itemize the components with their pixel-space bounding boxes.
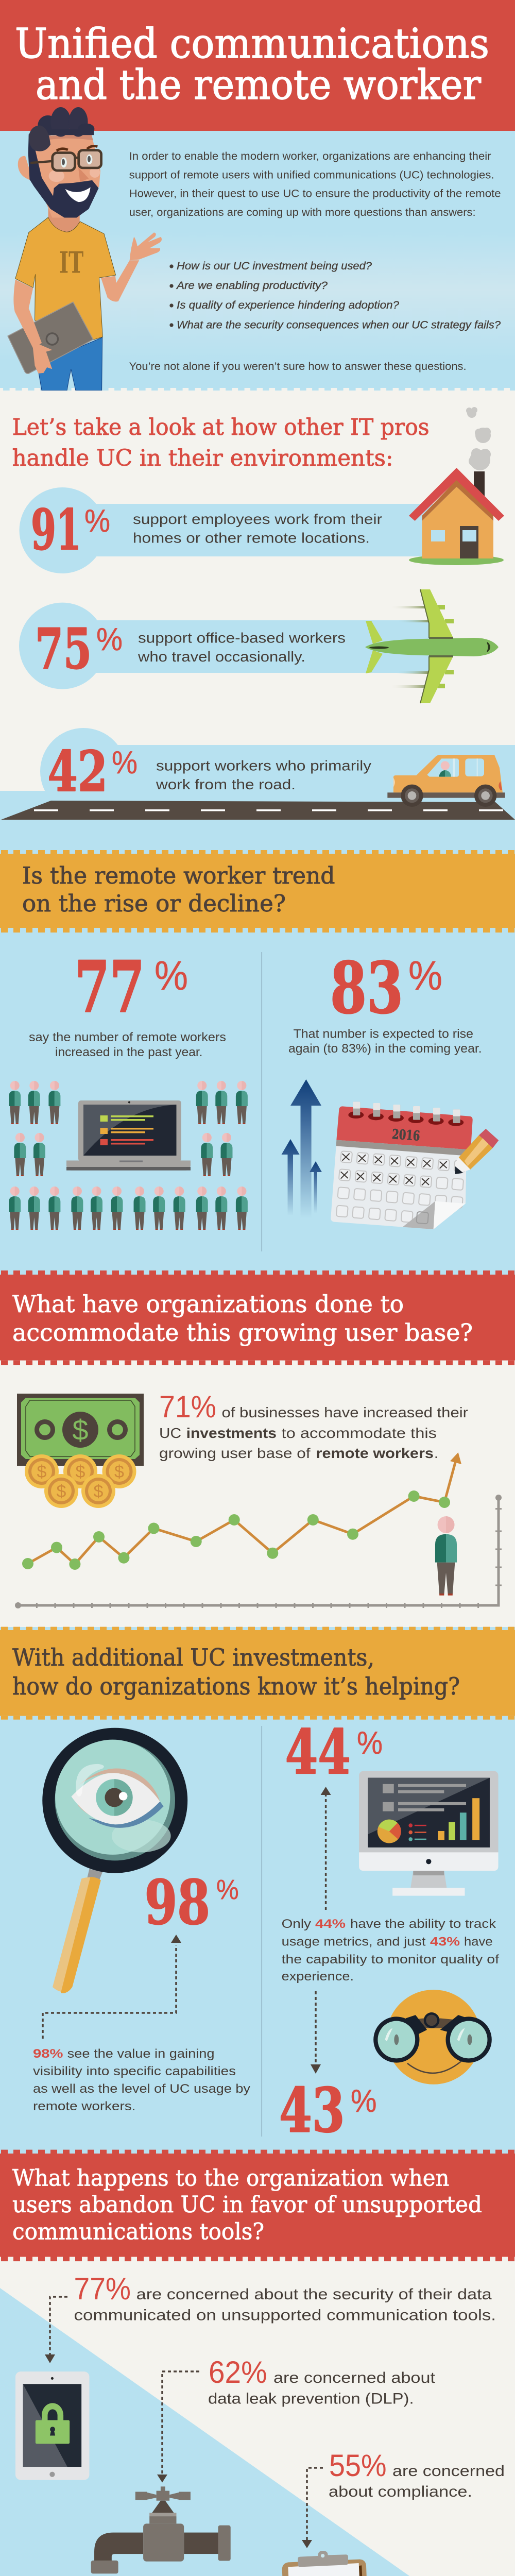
panel: how organizations know heading: [0, 1627, 515, 2150]
stat: 55% concern: [329, 2448, 505, 2500]
stat: 62% concern: data leak prevention (DLP).: [208, 2391, 414, 2408]
text: 44% and 43% description: the capability to monitor quality of: [282, 1953, 499, 1967]
icon: rising arrows: [281, 1079, 322, 1218]
stat text: 42%: work from the road.: [156, 776, 296, 792]
icon: house: [409, 407, 504, 565]
stat text: 42%: 42: [47, 739, 108, 804]
stat: 62% concern: [208, 2355, 436, 2408]
stat: 91%: support employees work from their: [133, 511, 382, 527]
stat text: 42%: support workers who primarily: [156, 757, 371, 774]
icon: money and coins: $: [94, 1482, 104, 1501]
intro text: [129, 150, 501, 218]
text: 44% and 43% description: have: [464, 1935, 493, 1948]
text: 44% and 43% description: usage metrics, and just: [282, 1935, 426, 1948]
stat: 98%: %: [216, 1874, 239, 1905]
line chart: [15, 1452, 502, 1608]
icon: calendar: [331, 1101, 499, 1229]
arrow: 43% connector: [311, 1991, 321, 2074]
heading: [12, 414, 430, 471]
question list: How is our UC investment being used?: [177, 260, 372, 272]
stat: 43%: %: [351, 2083, 377, 2119]
icon: money and coins: $: [37, 1462, 47, 1482]
intro text: However, in their quest to use UC to ensure the productivity of the remote: [129, 188, 501, 200]
stat: 75%: [19, 603, 430, 689]
stat: 98%: 98: [145, 1867, 210, 1938]
calendar year: 2016: [391, 1127, 420, 1144]
icon: person: [435, 1516, 457, 1596]
stat: 62% concern: are concerned about: [273, 2369, 436, 2386]
heading: accommodate this growing user base?: [12, 1319, 473, 1347]
text: 98% description: [33, 2047, 250, 2113]
stat: 91%: homes or other remote locations.: [133, 530, 370, 546]
icon: money and coins: $: [76, 1462, 85, 1482]
text: 98% description: 98%: [33, 2047, 63, 2061]
heading: [12, 2165, 482, 2245]
intro text: support of remote users with unified communications (UC) technologies.: [129, 169, 494, 181]
heading: users abandon UC in favor of unsupported: [12, 2192, 482, 2218]
stat: 91%: 91: [31, 498, 81, 563]
icon: tablet with lock: [15, 2371, 89, 2480]
heading: What have organizations done to: [12, 1290, 404, 1318]
heading: how do organizations know it’s helping?: [12, 1672, 460, 1700]
icon: magnifying glass with eye: [42, 1728, 187, 1993]
stat: 71% text: growing user base of: [159, 1445, 311, 1461]
title: [15, 20, 489, 109]
heading: With additional UC investments,: [12, 1643, 374, 1671]
stat text: 42%: [47, 739, 371, 804]
text: 98% description: as well as the level of UC usage by: [33, 2082, 250, 2096]
panel: what organizations have done heading: [0, 1270, 515, 1627]
panel: remote worker trend background: [0, 791, 515, 1270]
stat: 77%: %: [154, 953, 188, 998]
stat: 91%: [20, 487, 454, 573]
closing line: You’re not alone if you weren’t sure how to answer these questions.: [129, 361, 467, 372]
stat: 71% text: investments: [186, 1425, 277, 1441]
intro text: user, organizations are coming up with more questions than answers:: [129, 207, 476, 218]
stat: 77% concern: 77%: [74, 2272, 131, 2306]
illustration: IT worker character: [8, 107, 162, 391]
stat: 42%: [40, 728, 515, 815]
heading: Let’s take a look at how other IT pros: [12, 414, 430, 440]
question list: Are we enabling productivity?: [176, 280, 328, 292]
stat: 71% text: UC: [159, 1425, 181, 1441]
stat: 71% text: to accommodate this: [281, 1425, 437, 1441]
stat: 83%: [288, 947, 482, 1056]
stat: 77%: increased in the past year.: [55, 1045, 203, 1059]
icon: money and coins: $: [114, 1462, 124, 1482]
heading: [12, 1290, 473, 1347]
panel: header: [0, 0, 515, 131]
icon: monitor dashboard: [359, 1771, 499, 1896]
stat: 71% text: remote workers: [316, 1445, 434, 1461]
stat: 83%: 83: [330, 947, 403, 1029]
text: 44% and 43% description: experience.: [282, 1970, 354, 1984]
background: blue diagonal: [0, 2288, 496, 2576]
heading: communications tools?: [12, 2219, 264, 2245]
panel: trend heading band: [0, 850, 515, 933]
arrow: to faucet: [157, 2371, 199, 2483]
text: 98% description: see the value in gaining: [67, 2047, 214, 2061]
stat: 55% concern: 55%: [329, 2448, 387, 2483]
arrow: to tablet: [45, 2297, 67, 2363]
text: 44% and 43% description: Only: [282, 1917, 311, 1931]
stat: 75%: who travel occasionally.: [138, 649, 305, 665]
title: Unified communications: [15, 20, 489, 67]
icon: money and coins: [17, 1394, 144, 1508]
icon: money and coins: $: [72, 1414, 89, 1446]
arrow: 44% connector: [321, 1787, 331, 1910]
stat: 75%: %: [96, 622, 123, 657]
question list: [170, 260, 501, 331]
stat: 44%: %: [357, 1725, 383, 1761]
people icons: [9, 1081, 248, 1230]
icon: airplane: [365, 589, 499, 703]
stat: 77% concern: are concerned about the security of their data: [136, 2286, 492, 2303]
text: 98% description: remote workers.: [33, 2099, 135, 2113]
stat: 71% text: 71%: [159, 1389, 216, 1424]
arrow: 98% connector: [43, 1935, 181, 2039]
question list: What are the security consequences when our UC strategy fails?: [177, 319, 501, 331]
stat: 43%: 43: [279, 2074, 345, 2146]
heading: Is the remote worker trend: [22, 862, 335, 889]
stat: 77% concern: [74, 2272, 496, 2324]
stat text: 42%: %: [112, 745, 138, 781]
title: and the remote worker: [36, 61, 482, 109]
panel: how other IT pros handle UC: [0, 391, 515, 815]
heading: [22, 862, 335, 917]
icon: laptop: [66, 1100, 191, 1171]
text: 44% and 43% description: 44%: [315, 1917, 346, 1931]
arrow: to clipboard: [302, 2468, 323, 2548]
stat: 77%: [29, 946, 226, 1059]
panel: abandoning UC heading: [0, 2150, 515, 2576]
text: 44% and 43% description: have the ability to track: [350, 1917, 496, 1931]
stat: 62% concern: 62%: [209, 2355, 267, 2389]
stat: 71% text: [159, 1389, 468, 1461]
heading: [12, 1643, 460, 1700]
stat: 55% concern: about compliance.: [329, 2483, 472, 2500]
stat: 75%: 75: [35, 617, 92, 682]
stat: 75%: support office-based workers: [138, 630, 346, 646]
stat: 71% text: .: [434, 1445, 438, 1461]
icon: clipboard checklist: [282, 2551, 377, 2576]
icon: money and coins: $: [57, 1482, 66, 1501]
icon: dripping faucet: [86, 2486, 231, 2576]
stat: 71% text: of businesses have increased their: [221, 1404, 468, 1420]
stat: 55% concern: are concerned: [392, 2463, 505, 2480]
icon: car: [387, 755, 505, 807]
stat: 77% concern: communicated on unsupported communication tools.: [74, 2307, 496, 2324]
text: 98% description: visibility into specific capabilities: [33, 2064, 236, 2078]
stat: 83%: again (to 83%) in the coming year.: [288, 1042, 482, 1056]
heading: handle UC in their environments:: [12, 445, 393, 471]
stat: 83%: That number is expected to rise: [294, 1027, 473, 1041]
panel: intro: [0, 131, 515, 391]
question list: Is quality of experience hindering adoption?: [177, 299, 399, 311]
heading: on the rise or decline?: [22, 890, 286, 917]
intro text: In order to enable the modern worker, organizations are enhancing their: [129, 150, 491, 162]
stat: 77%: say the number of remote workers: [29, 1030, 226, 1044]
stat: 77%: 77: [75, 946, 145, 1029]
stat: 91%: %: [84, 503, 110, 539]
text: 44% and 43% description: 43%: [430, 1935, 460, 1948]
icon: binoculars face: [373, 1990, 492, 2084]
text: 44% and 43% description: [282, 1917, 499, 1984]
stat: 44%: 44: [285, 1716, 351, 1788]
stat: 83%: %: [408, 953, 442, 998]
IT shirt text: IT: [59, 245, 83, 280]
icon: road: [1, 801, 515, 820]
heading: What happens to the organization when: [12, 2165, 449, 2192]
